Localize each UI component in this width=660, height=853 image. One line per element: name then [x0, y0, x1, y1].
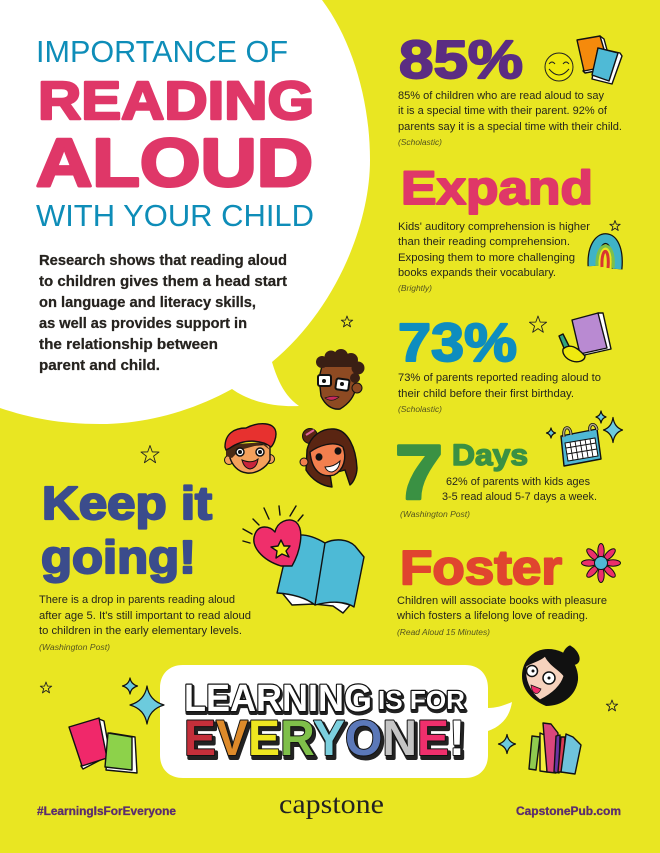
- icon: purple book and lipstick: [559, 313, 611, 362]
- icon: star right: [606, 700, 618, 711]
- title: READING: [38, 71, 314, 131]
- stat: 73%: [398, 313, 601, 414]
- stat: 73%: 73%: [398, 313, 517, 373]
- main speech bubble: [0, 0, 370, 424]
- stat: 73%: their child before their first birthday.: [398, 388, 574, 400]
- icon: star by 73%: [529, 316, 547, 332]
- title: [36, 35, 314, 233]
- icon: small star in bubble corner: [341, 316, 353, 327]
- stat: foster: which fosters a lifelong love of reading.: [396, 610, 588, 622]
- icon: flower: [582, 544, 620, 582]
- title: WITH YOUR CHILD: [36, 199, 314, 233]
- title: ALOUD: [36, 125, 313, 201]
- icon: sparkle right: [498, 734, 516, 754]
- icon: star by expand: [610, 220, 620, 230]
- stat: expand: than their reading comprehension.: [398, 236, 570, 248]
- icon: rainbow: [593, 239, 617, 269]
- stat: expand: Kids' auditory comprehension is higher: [398, 221, 590, 233]
- stat: 85%: parents say it is a special time with their child.: [398, 121, 622, 133]
- stat: 7 days: [395, 430, 597, 519]
- banner line 1 shadow: IS FOR: [379, 687, 466, 717]
- character: girl with bun: [300, 428, 357, 487]
- stat: 7 days: (Washington Post): [400, 510, 470, 519]
- icon: sparkles left: [122, 678, 164, 724]
- banner line 1: LEARNING: [184, 678, 372, 720]
- footer logo: capstone: [279, 789, 384, 819]
- stat: expand: books expands their vocabulary.: [398, 267, 556, 279]
- stat: expand: [398, 161, 593, 293]
- stat: 7 days: 7: [395, 430, 443, 516]
- intro text: [39, 253, 287, 374]
- intro text: parent and child.: [39, 358, 160, 374]
- banner line 1: IS FOR: [378, 685, 465, 715]
- stat: expand: Exposing them to more challenging: [398, 252, 575, 264]
- icon: sparkles by calendar: [546, 411, 622, 442]
- keep it going section: Keep it: [42, 477, 212, 529]
- banner line 2 shadow: EVERYONE!: [186, 713, 467, 769]
- footer url: CapstonePub.com: [516, 804, 621, 818]
- stat: expand: (Brightly): [398, 284, 432, 293]
- stat: 85%: 85%: [399, 30, 523, 90]
- keep it going section: There is a drop in parents reading aloud: [39, 594, 235, 606]
- intro text: Research shows that reading aloud: [39, 253, 287, 269]
- intro text: to children gives them a head start: [39, 274, 287, 290]
- stat: foster: [396, 542, 607, 637]
- keep it going section: (Washington Post): [39, 643, 110, 652]
- keep it going section: to children in the early elementary levels.: [39, 625, 242, 637]
- learning is for everyone banner: [160, 665, 512, 778]
- icon: row of books: [529, 723, 581, 774]
- keep it going section: going!: [41, 531, 196, 583]
- banner line 2: EVERYONE!: [184, 710, 465, 766]
- stat: expand: Expand: [401, 161, 593, 214]
- character: woman with ponytail: [522, 645, 580, 706]
- icon: star by boy: [141, 446, 159, 463]
- character: boy in red cap: [224, 424, 276, 473]
- stat: 85%: [398, 30, 622, 147]
- keep it going section: [39, 477, 251, 652]
- icon: calendar: [561, 424, 601, 466]
- icon: star left: [40, 682, 52, 693]
- stat: foster: (Read Aloud 15 Minutes): [397, 628, 490, 637]
- intro text: on language and literacy skills,: [39, 295, 256, 311]
- intro text: as well as provides support in: [39, 316, 247, 332]
- stat: 85%: 85% of children who are read aloud to say: [398, 90, 604, 102]
- character: man with glasses: [316, 349, 364, 409]
- keep it going section: after age 5. It's still important to read aloud: [39, 610, 251, 622]
- stat: 7 days: 3-5 read aloud 5-7 days a week.: [442, 491, 597, 503]
- icon: smiley: [545, 53, 573, 81]
- stat: 73%: 73% of parents reported reading aloud to: [398, 372, 601, 384]
- stat: 85%: (Scholastic): [398, 138, 442, 147]
- icon: open book with heart: [243, 506, 364, 613]
- intro text: the relationship between: [39, 337, 218, 353]
- stat: 73%: (Scholastic): [398, 405, 442, 414]
- stat: 85%: it is a special time with their parent. 92% of: [398, 105, 608, 117]
- icon: two books: [577, 36, 622, 84]
- stat: 7 days: Days: [452, 439, 528, 472]
- stat: foster: Foster: [400, 542, 562, 595]
- title: IMPORTANCE OF: [36, 35, 288, 69]
- banner line 1 shadow: LEARNING: [185, 680, 373, 722]
- footer hashtag: #LearningIsForEveryone: [37, 804, 176, 818]
- stat: foster: Children will associate books with pleasure: [397, 595, 607, 607]
- icon: pink and green books: [69, 718, 137, 773]
- stat: 7 days: 62% of parents with kids ages: [446, 476, 590, 488]
